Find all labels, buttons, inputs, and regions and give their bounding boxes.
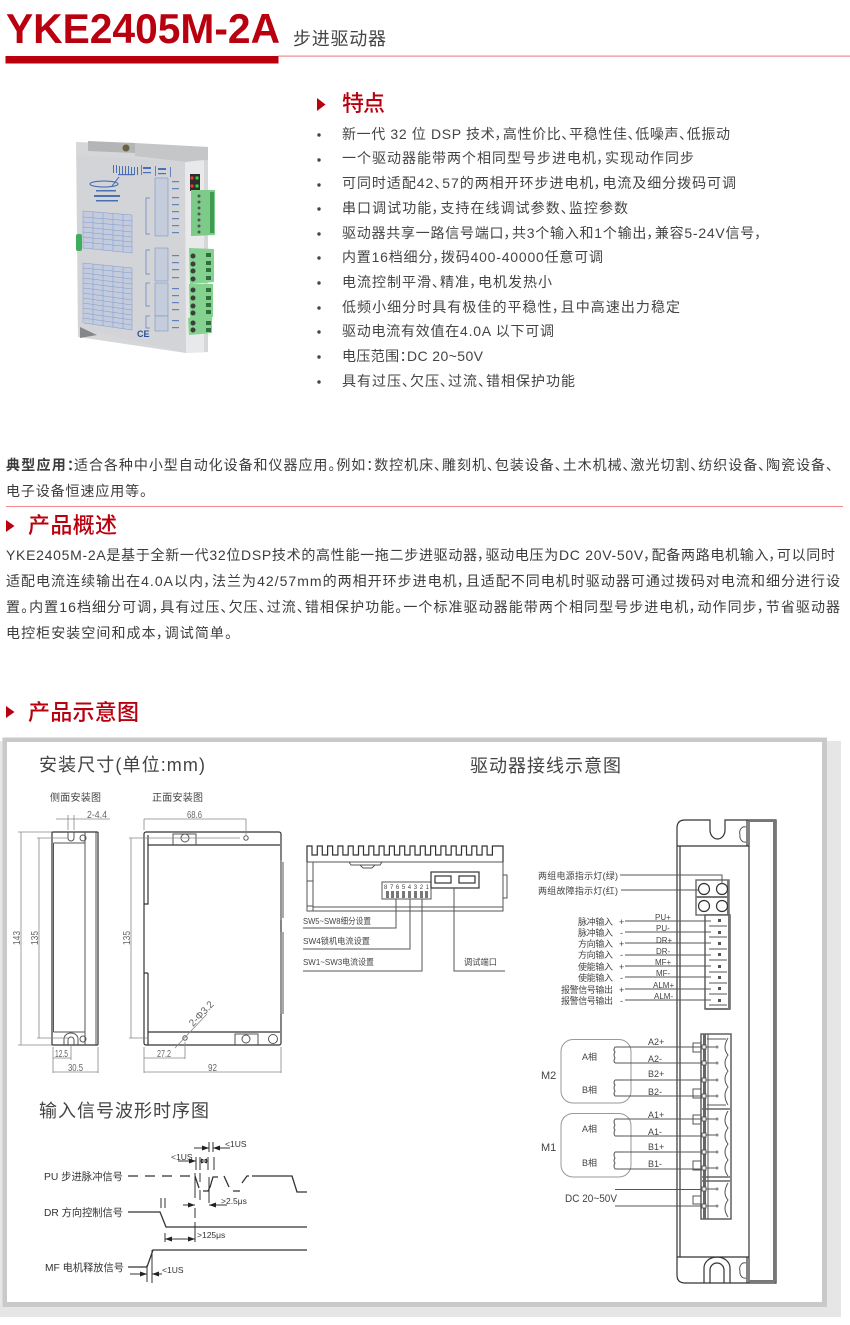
feature list: 电压范围：DC 20~50V [342,348,484,364]
overview paragraph: 适配电流连续输出在4.0A以内，法兰为42/57mm的两相开环步进电机，且适配不同电机时驱动器可通过拨码对电流和细分进行设 [6,573,840,589]
timing diagram: MF 电机释放信号 [45,1261,124,1274]
wiring: signal connector: 方向输入 [578,938,613,949]
feature list: 低频小细分时具有极佳的平稳性，且中高速出力稳定 [342,299,680,315]
typical applications text: 典型应用： [6,457,74,473]
label: front view: 正面安装图 [152,791,203,804]
wiring: motor M1: B1+ [648,1142,664,1152]
title underline [6,56,850,64]
heading: features [317,91,385,116]
timing diagram: DR 方向控制信号 [44,1206,123,1219]
feature list [317,126,762,389]
wiring: motor M1: A1- [648,1127,662,1137]
heading: product overview: 产品概述 [28,513,117,538]
wiring: motor M2: A2+ [648,1037,664,1047]
wiring: signal connector: - [620,973,623,983]
wiring: signal connector: - [620,928,623,938]
front mounting drawing: 92 [208,1063,217,1074]
timing diagram: >125μs [197,1230,225,1240]
wiring: signal connector: 使能输入 [578,972,613,983]
top view with DIP switches and debug ports [303,846,507,971]
heading: wiring diagram: 驱动器接线示意图 [470,756,621,776]
wiring: motor M2: M2 [541,1070,556,1082]
typical applications text [6,457,833,499]
wiring: indicator LEDs: 两组故障指示灯(红) [538,885,618,896]
side mounting drawing: 135 [30,931,41,945]
side mounting drawing: 2-4.4 [87,810,107,821]
top view with DIP switches and debug ports: SW4锁机电流设置 [303,936,370,946]
wiring: signal connector: + [619,917,624,927]
feature list: 驱动电流有效值在4.0A 以下可调 [342,323,554,339]
feature list: 内置16档细分，拨码400-40000任意可调 [342,249,603,265]
overview paragraph [6,547,840,641]
current table [83,211,132,253]
feature list: 可同时适配42、57的两相开环步进电机，电流及细分拨码可调 [342,175,736,191]
wiring: motor M2: B2+ [648,1069,664,1079]
wiring: signal connector: DR+ [656,936,673,945]
wiring: signal connector: + [619,939,624,949]
product photo: stepper driver [76,141,215,353]
top view with DIP switches and debug ports: SW5~SW8细分设置 [303,916,371,926]
feature list: 一个驱动器能带两个相同型号步进电机，实现动作同步 [342,150,694,166]
wiring: signal connector: + [619,962,624,972]
side mounting drawing: 12.5 [55,1049,68,1060]
title: 步进驱动器 [293,29,386,49]
wiring: signal connector: PU- [656,924,670,933]
wiring: motor M1: M1 [541,1142,556,1154]
heading: input signal timing: 输入信号波形时序图 [39,1101,209,1121]
timing diagram: <1US [162,1265,184,1275]
wiring: signal connector: ALM- [654,992,673,1001]
feature list: 串口调试功能，支持在线调试参数、监控参数 [342,200,628,216]
wiring: signal connector: - [620,996,623,1006]
top view with DIP switches and debug ports: SW1~SW3电流设置 [303,957,374,967]
typical applications text: 电子设备恒速应用等。 [6,483,147,499]
wiring: signal connector: + [619,985,624,995]
subdivision table [83,263,132,330]
label: side view: 侧面安装图 [50,791,101,804]
heading: product diagram: 产品示意图 [28,700,139,725]
wiring: signal connector: MF- [656,969,671,978]
wiring: signal connector: ALM+ [653,981,674,990]
typical applications text: 适合各种中小型自动化设备和仪器应用。例如：数控机床、雕刻机、包装设备、土木机械、激光切割、纺织设备、陶瓷设备、 [74,457,833,473]
wiring: motor M1: B相 [582,1157,597,1168]
wiring: motor M2: A2- [648,1054,662,1064]
wiring: power input [565,1190,702,1206]
LED block [190,174,200,191]
feature list: 具有过压、欠压、过流、错相保护功能 [342,373,575,389]
side mounting drawing [12,810,110,1074]
wiring: motor M1: A相 [582,1123,597,1134]
wiring: signal connector: 方向输入 [578,949,613,960]
wiring: motor M1: B1- [648,1159,662,1169]
front mounting drawing: 135 [122,931,133,945]
panel: diagram frame [0,738,841,1317]
front mounting drawing [122,810,283,1074]
timing diagram: PU 步进脉冲信号 [44,1170,123,1183]
timing diagram: <1US [225,1139,247,1149]
green terminals [191,190,215,236]
heading: mounting dimensions: 安装尺寸(单位:mm) [39,755,205,775]
wiring: signal connector [561,913,730,1009]
feature list: 驱动器共享一路信号端口，共3个输入和1个输出，兼容5-24V信号， [342,225,762,241]
wiring: indicator LEDs: 两组电源指示灯(绿) [538,870,618,881]
wiring: motor M2 [541,1037,702,1103]
overview paragraph: 置。内置16档细分可调，具有过压、欠压、过流、错相保护功能。一个标准驱动器能带两个相同型号步进电机，动作同步，节省驱动器 [6,599,840,615]
front mounting drawing: 27.2 [157,1049,171,1060]
wiring diagram: driver outline [677,820,776,1283]
front mounting drawing: 2-Φ3.2 [187,999,217,1029]
wiring: signal connector: DR- [656,947,671,956]
wiring: motor connectors [693,1034,731,1219]
side mounting drawing: 143 [12,931,23,945]
wiring: signal connector: 报警信号输出 [561,995,613,1006]
overview paragraph: 电控柜安装空间和成本，调试简单。 [6,625,232,641]
wiring: signal connector: PU+ [655,913,671,922]
wiring: signal connector: - [620,950,623,960]
terminal legend columns [155,178,168,331]
wiring: motor M2: B2- [648,1087,662,1097]
product photo: stepper driver: CE [137,329,150,339]
PASS sticker [76,234,82,251]
wiring: signal connector: 脉冲输入 [578,916,613,927]
logo and text on front face [90,165,171,202]
timing diagram: >2.5μs [221,1196,247,1206]
wiring: motor M2: B相 [582,1084,597,1095]
top view with DIP switches and debug ports: 调试端口 [464,957,497,967]
wiring: signal connector: MF+ [655,958,672,967]
wiring: indicator LEDs [538,870,729,915]
wiring: motor M1 [541,1110,702,1177]
front mounting drawing: 68.6 [187,810,202,821]
wiring: motor M2: A相 [582,1051,597,1062]
heading: features: 特点 [342,91,385,116]
side mounting drawing: 30.5 [68,1063,83,1074]
wiring: motor M1: A1+ [648,1110,664,1120]
feature list: 电流控制平滑、精准，电机发热小 [342,274,552,290]
feature list: 新一代 32 位 DSP 技术，高性价比、平稳性佳、低噪声、低振动 [342,126,730,142]
wiring: signal connector: 报警信号输出 [561,984,613,995]
overview paragraph: YKE2405M-2A是基于全新一代32位DSP技术的高性能一拖二步进驱动器，驱动电压为DC 20V-50V，配备两路电机输入，可以同时 [6,547,835,563]
wiring: signal connector: 使能输入 [578,961,613,972]
timing diagram: <1US [171,1152,193,1162]
wiring: power input: DC 20~50V [565,1193,618,1205]
title: YKE2405M-2A [6,5,280,52]
top view with DIP switches and debug ports: 87654321 [384,885,430,891]
timing diagram [44,1139,307,1283]
wiring: signal connector: 脉冲输入 [578,927,613,938]
